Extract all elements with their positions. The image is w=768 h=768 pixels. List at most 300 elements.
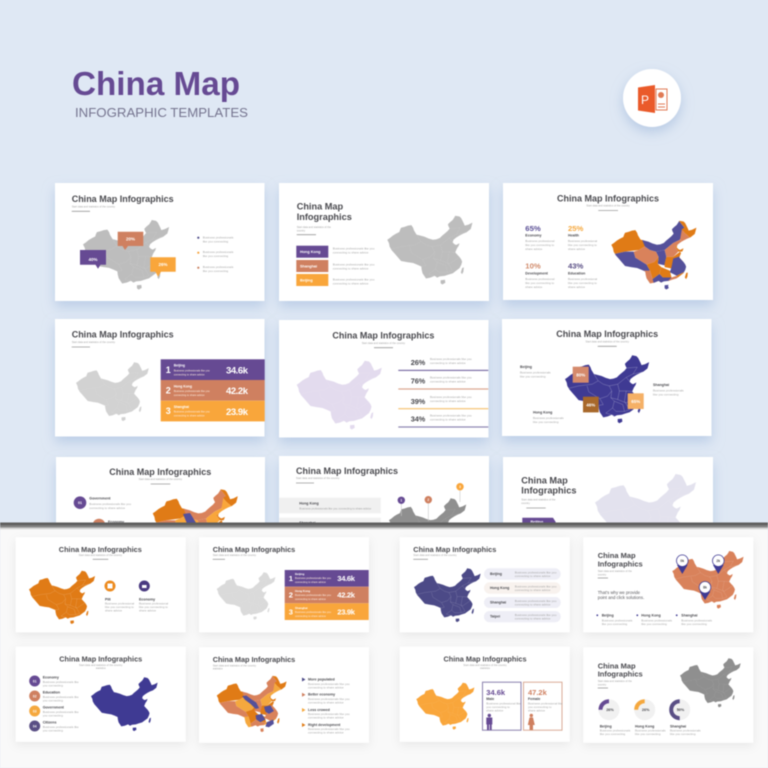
callout: 40% xyxy=(80,250,106,269)
pill: Hong Kong: connecting to share advice xyxy=(515,588,551,592)
stat: 10% development xyxy=(525,262,555,289)
map: yellow China xyxy=(416,683,474,730)
panel: slide pins with dark gray map (cropped) xyxy=(279,456,489,561)
list: Hong Kong: Business professionals xyxy=(641,618,672,622)
label: Hong Kong: Business professionals xyxy=(533,416,564,420)
panel: slide colored map with arrow list: Start data and statistics of the country xyxy=(213,664,257,668)
stat: 43% education: 43% xyxy=(568,262,584,271)
panel: slide city table with light gray map: Start data and statistics of the country xyxy=(72,340,116,344)
stat: 43% education: Education xyxy=(568,272,585,276)
panel: slide percent rows with lilac map: Start data and statistics of the country xyxy=(362,341,406,345)
item: Citizens: Business professionals like xyxy=(43,725,79,729)
slide title: China Map Infographics xyxy=(557,193,659,203)
table row: Beijing: connecting to share advice xyxy=(174,372,205,376)
table row: Beijing: Business professionals like you xyxy=(295,576,332,580)
item: Government: 01 xyxy=(78,501,82,505)
map: dark gray China xyxy=(389,498,466,561)
city rows: Beijing xyxy=(300,278,313,282)
pin 1: 1 xyxy=(400,498,402,502)
list: Less crowed: connecting to share advice xyxy=(308,716,344,720)
icon item: Pilt: Business professional xyxy=(105,602,135,606)
callout: 26%: 26% xyxy=(158,262,168,267)
panel: slide gray map with donut charts: country xyxy=(598,682,607,686)
panel: slide orange map with two icons: Start data and statistics of the country xyxy=(79,553,123,557)
list: More populated xyxy=(302,678,350,689)
row: 76%: Business professionals like you xyxy=(430,376,472,380)
donut: Shanghai 50%: Shanghai xyxy=(670,724,686,728)
callout: 26% xyxy=(150,257,176,277)
stat: 25% health: 25% xyxy=(568,224,584,233)
list: Right development xyxy=(302,723,350,734)
row: 26% xyxy=(398,357,488,371)
stat: 10% development: like you connecting to xyxy=(525,281,554,285)
table row: Beijing: 34.6k xyxy=(226,366,249,376)
panel: slide yellow map with male and female stats: statistics xyxy=(480,666,491,670)
main heading: China Map xyxy=(72,65,240,102)
slide title: China Map Infographics xyxy=(59,654,142,663)
band: Hong Kong: Hong Kong xyxy=(299,501,319,505)
donut: Shanghai 50%: like you connecting xyxy=(670,732,696,736)
label: Beijing: like you connecting xyxy=(520,374,546,378)
map: gray China xyxy=(387,216,472,284)
table row: Shanghai: connecting to share advice xyxy=(295,614,326,618)
callout: 80% xyxy=(573,367,589,383)
panel: slide tag with pale map (cropped): Start data and statistics of the xyxy=(521,498,556,502)
legend: like you connecting xyxy=(203,269,229,273)
item: Government: Business professionals like you xyxy=(89,502,131,506)
pill: Shanghai: Shanghai xyxy=(490,600,506,604)
pill: Shanghai: connecting to share advice xyxy=(515,602,551,606)
map: gray China xyxy=(83,220,169,290)
stat box: female: you connecting to xyxy=(528,705,552,709)
list: Hong Kong: like you connecting xyxy=(641,622,667,626)
location pin 2: 2k xyxy=(716,559,720,563)
callout: 65%: 65% xyxy=(631,399,640,404)
table row: Shanghai: Shanghai xyxy=(295,606,308,610)
item: Economy: Business professionals like xyxy=(43,680,79,684)
icon item: Pilt: Pilt xyxy=(105,597,111,601)
table row: Hong Kong: 42.2k xyxy=(226,386,249,397)
item: Economy: you connecting xyxy=(43,683,63,687)
row: 39%: 39% xyxy=(411,397,426,406)
icon item: Economy: like you connecting to xyxy=(139,605,168,609)
label: Shanghai: like you connecting xyxy=(653,392,679,396)
item: Economy: Economy xyxy=(43,676,59,680)
list: Better economy xyxy=(302,693,350,704)
slide title: China Map xyxy=(598,661,636,670)
list: Beijing: Business professionals xyxy=(602,618,633,622)
panel: slide callouts on gray map: Start data and statistics of the country xyxy=(72,204,116,208)
pin 1 xyxy=(398,497,405,516)
band: Hong Kong xyxy=(279,498,381,513)
slide title: Infographics xyxy=(297,212,352,222)
pill: Beijing xyxy=(484,568,561,580)
row: 34%: Business professionals like you xyxy=(430,414,472,418)
pill: Taipei: Taipei xyxy=(490,615,500,619)
table row: Beijing: 34.6k xyxy=(337,574,356,583)
city rows: Hong Kong xyxy=(300,250,321,254)
item: Education: Business professionals like xyxy=(43,695,79,699)
map: light gray China xyxy=(76,362,149,421)
donut: Shanghai 50%: Business professionals xyxy=(670,728,701,732)
label: Hong Kong: Hong Kong xyxy=(533,411,552,415)
icon item: Pilt xyxy=(104,580,135,612)
panel: slide city labels with gray map: Start data and statistics of the xyxy=(297,225,331,229)
stat: 10% development: Development xyxy=(525,272,549,276)
table row: Shanghai: 23.9k xyxy=(226,407,249,418)
stat box: female xyxy=(524,682,563,730)
panel: slide tag with pale map (cropped) xyxy=(503,457,713,556)
city rows: Shanghai xyxy=(300,264,317,268)
row: 76%: connecting to share advice xyxy=(430,380,466,384)
list: Less crowed xyxy=(302,708,350,720)
donut: Hong Kong 26%: Business professionals xyxy=(635,728,666,732)
donut: Beijing 26%: 26% xyxy=(606,708,614,712)
stat: 65% economy xyxy=(525,224,555,251)
stat: 43% education: like you connecting to xyxy=(568,281,597,285)
panel: slide city labels with gray map xyxy=(279,183,489,301)
list: Shanghai xyxy=(676,614,712,626)
band: Shanghai: Shanghai xyxy=(299,521,315,525)
slide title: China Map xyxy=(521,475,568,485)
icon item: Economy: Business professional xyxy=(139,602,169,606)
icon item: Pilt: share advice xyxy=(105,608,122,612)
legend: like you connecting xyxy=(203,240,229,244)
stat: 10% development: 10% xyxy=(525,262,541,271)
map: multicolor China xyxy=(215,674,289,734)
donut: Hong Kong 26%: 26% xyxy=(642,708,650,712)
pill: Hong Kong: Hong Kong xyxy=(490,586,509,590)
panel: slide numbered circles with navy map: Start data and statistics of the country xyxy=(79,663,123,667)
item: Education: Education xyxy=(43,691,60,695)
list: Right development: Business professionals like you xyxy=(308,727,350,731)
map: lilac China xyxy=(297,361,382,430)
callout: 80%: 80% xyxy=(576,372,585,378)
slide title: China Map xyxy=(297,201,344,211)
item: Citizens: 04 xyxy=(33,724,37,728)
location pin 1: 0k xyxy=(680,559,684,563)
icon item: Economy: Economy xyxy=(139,597,155,601)
stat: 43% education: share advice xyxy=(568,285,585,289)
table row: Shanghai: connecting to share advice xyxy=(174,414,205,418)
list: Right development: connecting to share advice xyxy=(308,730,344,734)
panel: slide yellow map with male and female stats: Start data and statistics of the country xyxy=(463,663,507,667)
icon item: Pilt: like you connecting to xyxy=(105,605,134,609)
table row: Hong Kong: 2 xyxy=(289,590,293,600)
table row: Beijing: connecting to share advice xyxy=(295,580,326,584)
map: slate China xyxy=(414,568,481,622)
item: Government: 03 xyxy=(33,709,37,713)
row: 34% xyxy=(398,414,488,428)
callout: 46% xyxy=(583,397,599,412)
map: navy China xyxy=(91,677,158,731)
slide title: China Map Infographics xyxy=(59,545,142,554)
list: More populated: Business professionals like you xyxy=(308,682,350,686)
stat: 25% health xyxy=(568,224,598,251)
band: Hong Kong: Business professionals like you connecting to share advice xyxy=(299,506,372,510)
panel: slide colored map with arrow list: statistics xyxy=(213,667,223,671)
icon: PowerPoint badge xyxy=(623,69,681,127)
label: Hong Kong: like you connecting xyxy=(533,420,559,424)
map: pale gray China xyxy=(217,572,275,620)
label: Hong Kong xyxy=(533,411,564,424)
stat: 65% economy: like you connecting to xyxy=(525,243,554,247)
list: Beijing xyxy=(596,614,633,626)
row: 34%: connecting to share advice xyxy=(430,418,466,422)
panel: slide salmon map with location pins: country xyxy=(598,572,607,576)
panel: slide city table lower xyxy=(199,537,369,632)
donut: Hong Kong 26%: Hong Kong xyxy=(635,724,654,728)
stat box: female: Female xyxy=(528,697,540,701)
map: multicolor China xyxy=(610,219,699,291)
stat: 65% economy: Economy xyxy=(525,234,541,238)
stat: 25% health: Health xyxy=(568,234,579,238)
donut: Beijing 26%: Beijing xyxy=(600,724,612,728)
pill: Taipei xyxy=(484,611,561,622)
table row: Shanghai: 23.9k xyxy=(337,608,356,617)
pill: Shanghai: Business professionals like you xyxy=(515,599,557,603)
city rows: connecting to share advice xyxy=(333,266,369,270)
list: Right development: Right development xyxy=(308,723,341,727)
panel: slide navy map with square callouts: Start data and statistics of the country xyxy=(585,340,630,344)
stat: 65% economy: share advice xyxy=(525,247,543,251)
stat: 25% health: Business professional xyxy=(568,239,598,243)
icon: female figure xyxy=(528,714,535,730)
callout: 65% xyxy=(628,393,644,409)
panel: slide pins with dark gray map (cropped): Start data and statistics of the country xyxy=(296,476,340,480)
label: Beijing: Beijing xyxy=(520,365,532,369)
label: Shanghai: Shanghai xyxy=(653,383,669,387)
location pin 2 xyxy=(712,555,724,574)
item: Government xyxy=(29,706,79,717)
panel: slide yellow map with male and female stats xyxy=(400,647,570,742)
pill: Shanghai xyxy=(484,597,561,608)
pin 2 xyxy=(425,496,432,521)
slide title: China Map Infographics xyxy=(72,329,174,339)
panel: slide gray map with donut charts xyxy=(583,647,753,743)
label: Shanghai: Business professionals xyxy=(653,388,684,392)
panel: slide navy map with pills: Start data and statistics of the country xyxy=(413,553,457,557)
table row: Beijing: 1 xyxy=(289,574,293,583)
list: Less crowed: Business professionals like you xyxy=(308,712,350,716)
location pin 3 xyxy=(699,582,711,600)
city rows: connecting to share advice xyxy=(333,250,369,254)
donut: Hong Kong 26%: like you connecting xyxy=(635,732,661,736)
table row: Hong Kong xyxy=(161,380,265,401)
panel: slide numbered circles with navy map: statistics xyxy=(96,666,106,670)
slide title: China Map Infographics xyxy=(444,654,526,663)
panel: slide callouts on gray map xyxy=(55,183,264,301)
donut: Shanghai 50% xyxy=(669,699,701,736)
row: 76%: 76% xyxy=(411,377,426,386)
panel: slide salmon map with location pins: Start data and statistics of the xyxy=(598,569,632,573)
list: Shanghai: Shanghai xyxy=(681,614,697,618)
stat box: male: you connecting to xyxy=(486,705,510,709)
callout: 40%: 40% xyxy=(88,257,98,262)
location pin 1 xyxy=(676,555,688,574)
donut: Hong Kong 26% xyxy=(634,699,666,736)
table row: Hong Kong: Business professionals like you xyxy=(295,593,332,597)
panel: slide salmon map with location pins: point and click solutions. xyxy=(598,595,644,600)
panel: slide city table with light gray map xyxy=(55,319,265,436)
item: Citizens: you connecting xyxy=(43,728,63,732)
callout: 20%: 20% xyxy=(126,236,135,242)
pin 2: 2 xyxy=(427,498,429,502)
icon: PowerPoint badge: P xyxy=(641,93,649,107)
pill: Hong Kong xyxy=(484,582,561,594)
band: Shanghai xyxy=(279,518,381,533)
city rows xyxy=(296,246,375,286)
map: navy China xyxy=(565,355,649,423)
slide title: Infographics xyxy=(598,670,643,679)
row: 39%: connecting to share advice xyxy=(430,399,466,403)
table row: Hong Kong: 42.2k xyxy=(337,591,356,600)
list: Better economy: connecting to share advice xyxy=(308,700,344,704)
pill: Hong Kong: Business professionals like you xyxy=(515,584,557,588)
table row: Hong Kong: Hong Kong xyxy=(174,384,192,388)
label: Beijing: Business professionals xyxy=(520,370,551,374)
item: Citizens: Citizens xyxy=(43,720,56,724)
location pin 3: 8k xyxy=(703,586,707,590)
item: Economy xyxy=(93,519,124,531)
slide title: China Map Infographics xyxy=(296,466,398,476)
table row: Hong Kong: 2 xyxy=(166,386,171,396)
city rows: connecting to share advice xyxy=(333,282,369,286)
panel: slide percent stats with colored map xyxy=(503,183,713,300)
callout: 46%: 46% xyxy=(586,402,595,408)
row: 26%: connecting to share advice xyxy=(430,361,466,365)
item: Government: you connecting xyxy=(43,713,63,717)
stat: 10% development: share advice xyxy=(525,285,543,289)
pill: Taipei: connecting to share advice xyxy=(515,616,551,620)
panel: slide tag with pale map (cropped): country xyxy=(521,501,531,505)
panel: slide numbered topics with orange map (cropped) xyxy=(56,457,265,560)
legend: Business professionals xyxy=(203,236,234,240)
pin 3 xyxy=(456,483,464,502)
item: Government: Government xyxy=(89,496,111,500)
table row: Beijing: Beijing xyxy=(295,572,305,576)
panel: slide numbered circles with navy map xyxy=(16,647,186,742)
panel: slide navy map with square callouts xyxy=(502,319,712,436)
pin 3: 3 xyxy=(459,485,461,489)
stat: 65% economy: Business professional xyxy=(525,239,555,243)
panel: slide city labels with gray map: country xyxy=(297,228,306,232)
map: orange China xyxy=(29,571,95,624)
stat box: male: Business professional like xyxy=(486,702,521,706)
panel: slide gray map with donut charts: Start data and statistics of the xyxy=(598,679,632,683)
table row: Beijing xyxy=(161,359,265,380)
table row: Shanghai xyxy=(285,603,369,620)
table row: Hong Kong: Business professionals like you xyxy=(174,389,210,393)
item: Economy: 01 xyxy=(33,679,37,683)
row: 26%: Business professionals like you xyxy=(430,357,472,361)
panel: slide orange map with two icons xyxy=(16,537,186,632)
callout: 20% xyxy=(118,232,143,250)
legend: Business professionals xyxy=(203,265,234,269)
panel: slide numbered topics with orange map (cropped): Start data and statistics of the country xyxy=(139,477,183,481)
stat box: female: share advice xyxy=(528,708,545,712)
stat box: female: Business professional like xyxy=(528,702,563,706)
item: Economy: Economy xyxy=(108,520,124,524)
row: 39% xyxy=(398,395,488,409)
list: Better economy: Business professionals like you xyxy=(308,697,350,701)
item: Government: Business professionals like xyxy=(43,710,79,714)
map: multicolor China xyxy=(151,488,240,560)
table row: Shanghai: Shanghai xyxy=(174,405,189,409)
tagline: That's why we provide xyxy=(598,590,641,595)
panel: slide navy map with pills xyxy=(400,537,570,632)
row: 39%: Business professionals like you xyxy=(430,395,472,399)
stat: 43% education: Business professional xyxy=(568,277,598,281)
pill: Beijing: Beijing xyxy=(490,572,502,576)
list: Shanghai: like you connecting xyxy=(681,622,707,626)
item: Government: connecting to share advice xyxy=(89,506,125,510)
stat box: male xyxy=(482,682,521,730)
stat: 25% health: like you connecting to xyxy=(568,243,597,247)
legend xyxy=(197,236,234,273)
list: More populated: connecting to share advice xyxy=(308,685,344,689)
icon item: Economy xyxy=(139,580,169,612)
stat: 10% development: Business professional xyxy=(525,277,555,281)
row: 76% xyxy=(398,376,488,390)
table row: Shanghai xyxy=(161,401,265,421)
row: 26%: 26% xyxy=(411,358,426,367)
list: Better economy: Better economy xyxy=(308,693,335,697)
item: Education: you connecting xyxy=(43,698,63,702)
list: Beijing: like you connecting xyxy=(602,622,628,626)
divider shadow bar xyxy=(0,522,768,530)
table row: Hong Kong xyxy=(285,587,369,603)
item: Government: Government xyxy=(43,706,65,710)
pill: Beijing: connecting to share advice xyxy=(515,574,551,578)
table row: Hong Kong: connecting to share advice xyxy=(174,393,205,397)
panel: slide salmon map with location pins xyxy=(583,537,753,632)
icon item: Economy: share advice xyxy=(139,608,156,612)
list: Shanghai: Business professionals xyxy=(681,618,712,622)
legend: Business professionals xyxy=(203,250,234,254)
slide title: Infographics xyxy=(521,486,576,496)
subheading: INFOGRAPHIC TEMPLATES xyxy=(75,105,248,120)
item: Government xyxy=(74,496,131,510)
slide title: China Map xyxy=(598,551,636,560)
legend: like you connecting xyxy=(203,254,229,258)
item: Education: 02 xyxy=(33,694,37,698)
pill: Beijing: Business professionals like you xyxy=(515,570,557,574)
panel: slide city table lower: Start data and statistics of the country xyxy=(213,553,257,557)
tag: Beijing: Beijing xyxy=(530,520,544,524)
panel: slide percent stats with colored map: Start data and statistics of the country xyxy=(586,204,630,208)
donut: Beijing 26%: like you connecting xyxy=(600,732,626,736)
item: Economy xyxy=(29,676,79,687)
pill: Taipei: Business professionals like you xyxy=(515,613,557,617)
donut: Shanghai 50%: 50% xyxy=(677,708,685,712)
stat: 65% economy: 65% xyxy=(525,224,541,233)
label: Beijing xyxy=(520,365,551,378)
stat box: male: share advice xyxy=(486,708,504,712)
city rows: Business professionals like you xyxy=(333,262,375,266)
list: Hong Kong xyxy=(636,614,672,626)
item: Education xyxy=(29,690,79,702)
stat box: male: Male xyxy=(486,697,494,701)
list: Less crowed: Less crowed xyxy=(308,708,330,712)
slide title: China Map Infographics xyxy=(109,467,211,477)
stat: 25% health: share advice xyxy=(568,247,585,251)
tag: Beijing xyxy=(522,518,556,532)
table row: Shanghai: Business professionals like you xyxy=(295,610,332,614)
list: Beijing: Beijing xyxy=(602,614,614,618)
city rows: Business professionals like you xyxy=(333,246,375,250)
donut: Beijing 26% xyxy=(598,699,631,736)
